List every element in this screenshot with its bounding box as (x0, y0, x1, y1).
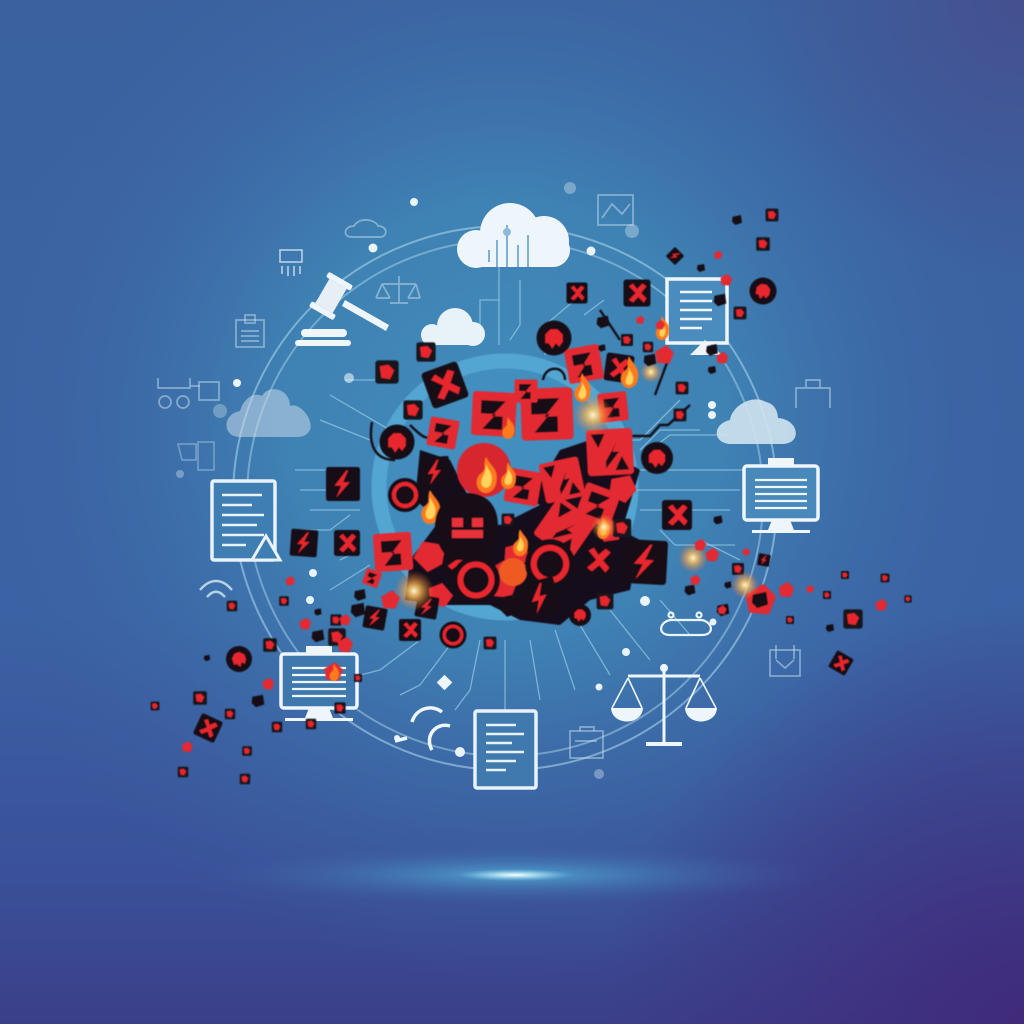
icon: monitor lower left (281, 646, 357, 721)
icon: cart diagram (158, 378, 219, 408)
icon: flow chart left (178, 442, 214, 470)
icon: printer with drips (280, 250, 302, 276)
white network nodes (176, 182, 716, 779)
debris scattering upper right (597, 209, 779, 421)
icon: wifi (200, 581, 232, 597)
icon: scales of justice (611, 664, 717, 744)
icon: cloud right (717, 399, 796, 444)
icon: chart top right (598, 195, 633, 225)
icon: faint cloud top (345, 220, 386, 237)
flames (421, 316, 669, 556)
icon: faint scales top (376, 276, 420, 303)
icon: document upper right (667, 279, 727, 355)
icon: faint cloud outline bottom right (661, 612, 711, 635)
icon: small cloud (421, 308, 485, 346)
tiles front layer (290, 280, 692, 649)
icon: network right (796, 380, 830, 408)
icon: document left (212, 481, 280, 560)
icon: gavel (295, 272, 389, 346)
floor glow (205, 845, 825, 905)
dark connector cables (371, 310, 690, 460)
icon: diamond node (437, 675, 452, 690)
debris scattering right (685, 516, 912, 676)
sparks (394, 361, 708, 611)
faint outline icons (158, 195, 830, 758)
icon: monitor right (744, 458, 818, 533)
icon: main cloud with circuit (457, 203, 570, 268)
tiles back layer (410, 344, 640, 609)
debris scattering lower left (151, 568, 400, 784)
icon: document bottom (475, 711, 536, 788)
icon: clipboard (236, 315, 264, 347)
central attack cluster (290, 280, 708, 649)
icon: recycle arrows (395, 708, 450, 750)
black mass fragments (405, 440, 640, 625)
icon: faint cloud left (226, 389, 311, 437)
circuit traces (295, 265, 760, 720)
icon: briefcase (570, 727, 603, 758)
angry face disc (435, 493, 498, 560)
icon: chart bottom right (770, 645, 800, 676)
network rings (233, 226, 777, 770)
central glowing core ring (379, 361, 631, 613)
